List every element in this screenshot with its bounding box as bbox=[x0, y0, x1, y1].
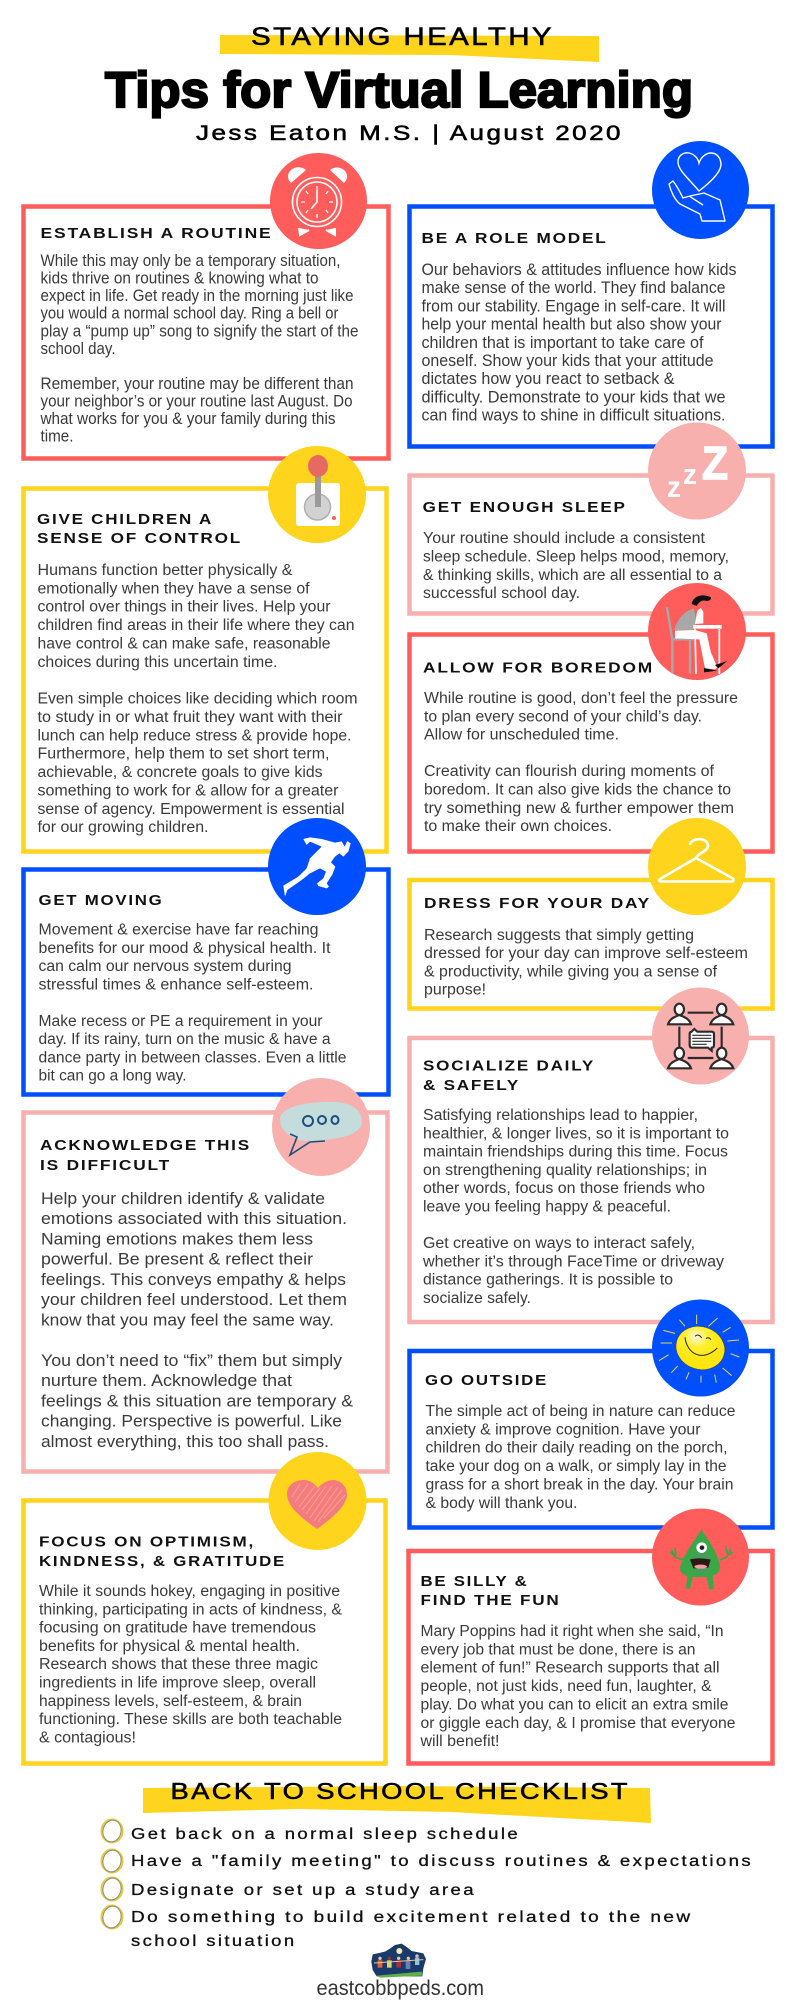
icon: heart in hand bbox=[652, 141, 749, 239]
icon: sleeping z letters bbox=[648, 422, 746, 520]
heading: GO OUTSIDE bbox=[425, 1373, 548, 1389]
panel border bbox=[24, 1112, 388, 1472]
body text: changing. Perspective is powerful. Like bbox=[41, 1412, 342, 1431]
checklist item 3: Designate or set up a study area bbox=[131, 1882, 476, 1899]
panel border bbox=[24, 870, 388, 1094]
body text: have control & can make safe, reasonable bbox=[38, 636, 330, 652]
body text: dressed for your day can improve self-esteem bbox=[424, 945, 748, 962]
icon: sleeping z letters: z bbox=[667, 471, 681, 504]
body text: sleep schedule. Sleep helps mood, memory, bbox=[423, 548, 729, 565]
body text: help your mental health but also show your bbox=[422, 316, 722, 334]
body text: benefits for physical & mental health. bbox=[39, 1638, 300, 1655]
body text: Get creative on ways to interact safely, bbox=[423, 1235, 695, 1252]
body text: feelings & this situation are temporary & bbox=[41, 1391, 354, 1410]
panel: get moving bbox=[24, 818, 388, 1094]
checklist item 4: Do something to build excitement related to the new bbox=[131, 1909, 692, 1926]
icon: green one-eyed monster bbox=[652, 1508, 749, 1606]
body text: & thinking skills, which are all essential to a bbox=[423, 567, 722, 584]
checklist item 1 bbox=[101, 1818, 520, 1844]
body text: feelings. This conveys empathy & helps bbox=[41, 1270, 346, 1289]
body text: Mary Poppins had it right when she said, “In bbox=[420, 1623, 724, 1640]
heading: ACKNOWLEDGE THIS bbox=[40, 1138, 251, 1154]
body text: people, not just kids, need fun, laughter, & bbox=[420, 1678, 712, 1695]
panel border bbox=[24, 488, 386, 852]
body text: Our behaviors & attitudes influence how kids bbox=[422, 261, 736, 279]
body text: Your routine should include a consistent bbox=[423, 530, 706, 547]
panel: be silly and find the fun bbox=[408, 1508, 772, 1764]
panel border bbox=[408, 1551, 772, 1764]
body text bbox=[424, 690, 738, 835]
body text: make sense of the world. They find balance bbox=[422, 279, 726, 297]
body text: While this may only be a temporary situation, bbox=[40, 252, 340, 270]
body text: school day. bbox=[40, 340, 116, 358]
body text: every job that must be done, there is an bbox=[420, 1641, 696, 1658]
panel border bbox=[410, 476, 772, 614]
panel border bbox=[410, 1351, 772, 1528]
body text: take your dog on a walk, or simply lay in the bbox=[426, 1458, 726, 1475]
body text: will benefit! bbox=[419, 1733, 500, 1750]
body text: nurture them. Acknowledge that bbox=[41, 1371, 292, 1390]
body text: or giggle each day, & I promise that everyone bbox=[420, 1715, 736, 1732]
body text bbox=[39, 1583, 343, 1746]
body text: your neighbor’s or your routine last August. Do bbox=[40, 393, 352, 411]
heading bbox=[37, 512, 242, 547]
icon: scribbled heart bbox=[268, 1452, 366, 1550]
heading: KINDNESS, & GRATITUDE bbox=[39, 1554, 286, 1570]
body text: boredom. It can also give kids the chance to bbox=[424, 782, 731, 798]
back to school checklist bbox=[101, 1778, 753, 1950]
body text: to study in or what fruit they want with their bbox=[38, 709, 342, 726]
body text bbox=[423, 530, 729, 602]
heading: GET MOVING bbox=[38, 893, 164, 909]
icon: sleeping z letters: Z bbox=[702, 437, 728, 489]
panel: socialize daily and safely bbox=[410, 988, 772, 1322]
icon: sleeping z letters: z bbox=[683, 459, 697, 491]
body text: bit can go a long way. bbox=[38, 1068, 186, 1085]
body text: functioning. These skills are both teachable bbox=[39, 1711, 342, 1728]
panel: establish a routine bbox=[24, 153, 388, 458]
body text bbox=[426, 1403, 736, 1512]
body text: something to work for & allow for a greater bbox=[38, 782, 338, 799]
icon: connected people network bbox=[652, 988, 749, 1084]
yellow brush stroke bbox=[143, 1786, 651, 1823]
body text: Satisfying relationships lead to happier, bbox=[423, 1107, 698, 1124]
body text: While routine is good, don’t feel the pressure bbox=[424, 690, 738, 707]
body text: what works for you & your family during this bbox=[40, 410, 335, 428]
panel: give children a sense of control bbox=[24, 446, 386, 852]
body text: Even simple choices like deciding which room bbox=[38, 691, 358, 708]
body text: & contagious! bbox=[39, 1729, 136, 1746]
panel: go outside bbox=[410, 1300, 772, 1528]
header bbox=[105, 23, 693, 145]
body text: to make their own choices. bbox=[424, 818, 612, 835]
body text: kids thrive on routines & knowing what to bbox=[40, 270, 318, 288]
body text: While it sounds hokey, engaging in positive bbox=[39, 1583, 340, 1600]
body text: whether it’s through FaceTime or driveway bbox=[422, 1253, 724, 1270]
body text bbox=[422, 1107, 729, 1307]
body text: Humans function better physically & bbox=[38, 562, 293, 579]
checklist item 4 bbox=[101, 1904, 692, 1950]
body text: children that is important to take care of bbox=[422, 334, 704, 352]
body text: Make recess or PE a requirement in your bbox=[38, 1013, 322, 1030]
body text bbox=[38, 922, 346, 1085]
body text: thinking, participating in acts of kindness, & bbox=[39, 1601, 343, 1618]
body text: element of fun!” Research supports that all bbox=[420, 1660, 720, 1677]
panel border bbox=[410, 880, 772, 1008]
body text: Naming emotions makes them less bbox=[41, 1230, 313, 1248]
kicker: staying healthy: STAYING HEALTHY bbox=[251, 23, 554, 51]
body text: almost everything, this too shall pass. bbox=[41, 1432, 329, 1451]
body text: anxiety & improve cognition. Have your bbox=[426, 1421, 700, 1438]
body text: choices during this uncertain time. bbox=[38, 654, 278, 671]
checklist heading: BACK TO SCHOOL CHECKLIST bbox=[170, 1778, 630, 1804]
checklist item 2 bbox=[101, 1848, 753, 1874]
body text: oneself. Show your kids that your attitude bbox=[422, 352, 714, 370]
body text bbox=[40, 252, 358, 446]
panel border bbox=[410, 1038, 772, 1322]
body text: happiness levels, self-esteem, & brain bbox=[39, 1693, 302, 1710]
body text: day. If its rainy, turn on the music & have a bbox=[38, 1031, 331, 1048]
heading bbox=[40, 1138, 251, 1174]
body text: successful school day. bbox=[423, 585, 580, 602]
checklist item 2: Have a "family meeting" to discuss routines & expectations bbox=[131, 1853, 753, 1870]
body text: ingredients in life improve sleep, overall bbox=[39, 1674, 316, 1692]
body text bbox=[38, 562, 358, 836]
checklist item 1: Get back on a normal sleep schedule bbox=[131, 1826, 520, 1843]
body text: Research suggests that simply getting bbox=[424, 927, 694, 944]
body text: on strengthening quality relationships; in bbox=[423, 1162, 707, 1179]
body text: The simple act of being in nature can reduce bbox=[426, 1403, 736, 1420]
body text: children do their daily reading on the porch, bbox=[426, 1440, 728, 1457]
body text: expect in life. Get ready in the morning just like bbox=[40, 287, 354, 305]
heading bbox=[420, 1574, 560, 1609]
body text: Help your children identify & validate bbox=[41, 1189, 325, 1208]
body text: leave you feeling happy & peaceful. bbox=[423, 1198, 671, 1216]
body text: maintain friendships during this time. Focus bbox=[423, 1144, 728, 1161]
heading: BE A ROLE MODEL bbox=[422, 231, 608, 247]
icon: sprinter bbox=[268, 818, 366, 915]
body text: your children feel understood. Let them bbox=[41, 1290, 347, 1309]
body text: you would a normal school day. Ring a bell or bbox=[40, 305, 339, 323]
body text: sense of agency. Empowerment is essential bbox=[38, 801, 344, 818]
body text: for our growing children. bbox=[38, 819, 208, 836]
body text: dictates how you react to setback & bbox=[422, 370, 674, 388]
body text: You don’t need to “fix” them but simply bbox=[41, 1351, 343, 1370]
heading: IS DIFFICULT bbox=[40, 1158, 171, 1174]
body text: powerful. Be present & reflect their bbox=[41, 1250, 313, 1269]
panel: be a role model bbox=[410, 141, 772, 446]
icon: smiling sun bbox=[652, 1300, 749, 1396]
footer website: eastcobbpeds.com bbox=[316, 1977, 484, 2000]
heading: FOCUS ON OPTIMISM, bbox=[39, 1535, 255, 1551]
body text bbox=[41, 1189, 354, 1451]
body text: emotionally when they have a sense of bbox=[38, 580, 310, 597]
body text: lunch can help reduce stress & provide hope. bbox=[38, 727, 352, 744]
body text: dance party in between classes. Even a little bbox=[38, 1049, 346, 1066]
heading: SOCIALIZE DAILY bbox=[423, 1059, 595, 1075]
checklist item 3 bbox=[101, 1876, 476, 1902]
body text bbox=[424, 927, 748, 999]
icon: joystick bbox=[268, 446, 366, 543]
body text: can calm our nervous system during bbox=[38, 958, 292, 975]
body text: distance gatherings. It is possible to bbox=[423, 1272, 673, 1289]
body text: can find ways to shine in difficult situations. bbox=[422, 407, 726, 425]
heading: ALLOW FOR BOREDOM bbox=[423, 661, 654, 677]
body text: Allow for unscheduled time. bbox=[424, 727, 619, 744]
panel: focus on optimism bbox=[24, 1452, 386, 1764]
body text: & productivity, while giving you a sense of bbox=[424, 963, 718, 980]
body text: achievable, & concrete goals to give kids bbox=[38, 764, 323, 781]
heading: BE SILLY & bbox=[420, 1574, 528, 1590]
body text: grass for a short break in the day. Your brain bbox=[426, 1476, 734, 1494]
body text: from our stability. Engage in self-care. It will bbox=[422, 297, 726, 315]
body text: Furthermore, help them to set short term, bbox=[38, 746, 330, 763]
title: Tips for Virtual Learning bbox=[105, 62, 693, 118]
panel: allow for boredom bbox=[410, 583, 772, 852]
body text: focusing on gratitude have tremendous bbox=[39, 1620, 316, 1637]
icon: speech bubble bbox=[272, 1078, 370, 1176]
body text: other words, focus on those friends who bbox=[423, 1180, 705, 1197]
heading: & SAFELY bbox=[423, 1078, 520, 1094]
panel: dress for your day bbox=[410, 818, 772, 1008]
body text: emotions associated with this situation. bbox=[41, 1209, 347, 1228]
body text: Remember, your routine may be different than bbox=[40, 375, 354, 393]
body text bbox=[422, 261, 736, 425]
panel border bbox=[24, 206, 388, 458]
heading bbox=[423, 1059, 595, 1094]
panel border bbox=[410, 206, 772, 446]
panel: get enough sleep bbox=[410, 422, 772, 614]
heading bbox=[39, 1535, 286, 1570]
heading: ESTABLISH A ROUTINE bbox=[40, 226, 272, 242]
icon: alarm clock bbox=[270, 153, 367, 249]
yellow brush stroke behind kicker bbox=[220, 35, 599, 62]
panel border bbox=[410, 634, 772, 852]
body text: try something new & further empower them bbox=[424, 800, 734, 817]
body text: play. Do what you can to elicit an extra smile bbox=[420, 1696, 728, 1714]
body text bbox=[419, 1623, 736, 1750]
icon: bored student at desk bbox=[648, 583, 746, 680]
body text: Research shows that these three magic bbox=[39, 1656, 318, 1673]
body text: play a “pump up” song to signify the start of the bbox=[40, 322, 358, 340]
body text: control over things in their lives. Help your bbox=[38, 599, 330, 616]
body text: & body will thank you. bbox=[426, 1495, 578, 1512]
body text: time. bbox=[40, 428, 74, 446]
body text: know that you may feel the same way. bbox=[41, 1310, 334, 1329]
byline: Jess Eaton M.S. | August 2020 bbox=[196, 122, 623, 145]
heading: GET ENOUGH SLEEP bbox=[423, 500, 627, 516]
checklist item 4: school situation bbox=[131, 1933, 296, 1950]
body text: purpose! bbox=[424, 982, 486, 999]
heading: FIND THE FUN bbox=[420, 1593, 560, 1609]
body text: Creativity can flourish during moments of bbox=[424, 763, 715, 780]
footer logo: children under sun bbox=[371, 1944, 426, 1978]
body text: to plan every second of your child’s day. bbox=[424, 708, 702, 725]
panel: acknowledge this is difficult bbox=[24, 1078, 388, 1472]
body text: children find areas in their life where they can bbox=[38, 617, 354, 634]
body text: Movement & exercise have far reaching bbox=[38, 922, 318, 938]
heading: DRESS FOR YOUR DAY bbox=[424, 896, 651, 912]
heading: GIVE CHILDREN A bbox=[37, 512, 213, 528]
body text: socialize safely. bbox=[423, 1290, 531, 1307]
body text: benefits for our mood & physical health. It bbox=[38, 940, 331, 957]
icon: clothes hanger bbox=[648, 818, 746, 915]
body text: stressful times & enhance self-esteem. bbox=[38, 976, 314, 993]
body text: difficulty. Demonstrate to your kids that we bbox=[422, 388, 726, 406]
heading: SENSE OF CONTROL bbox=[37, 531, 242, 547]
body text: healthier, & longer lives, so it is important to bbox=[423, 1125, 729, 1142]
panel border bbox=[24, 1500, 386, 1764]
